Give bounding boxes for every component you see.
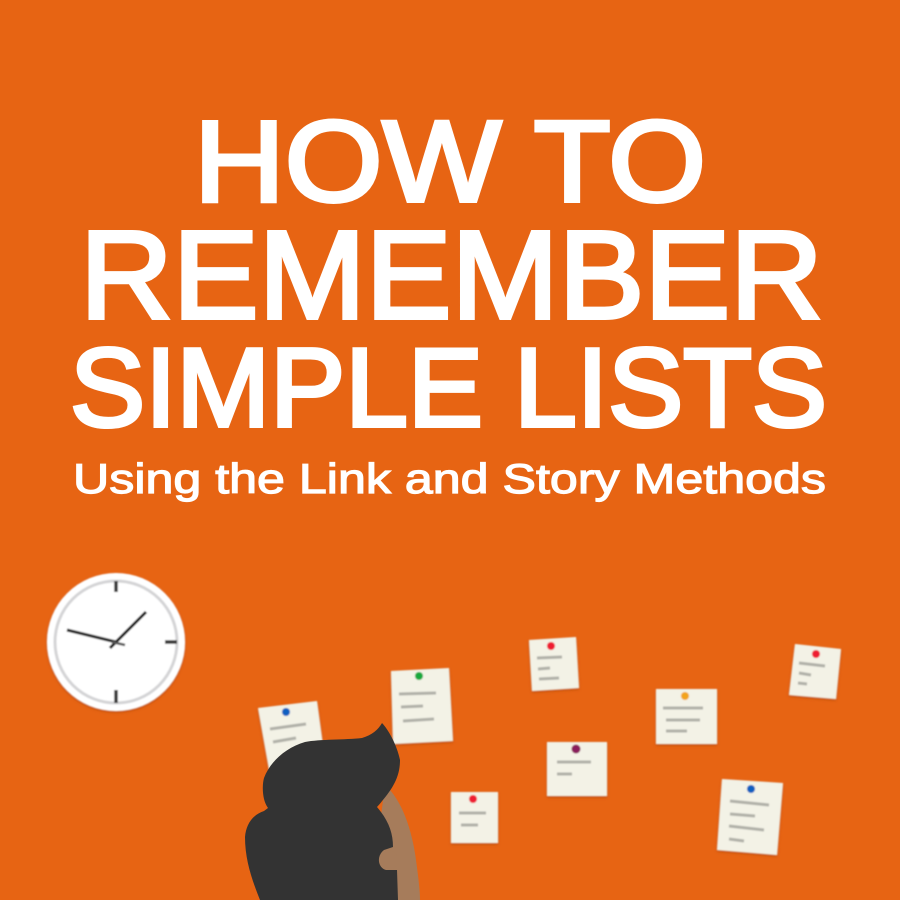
note: red pin top — [529, 637, 579, 691]
subtitle: Using the Link and Story Methods — [73, 455, 826, 502]
title: SIMPLE LISTS — [70, 326, 827, 450]
note: red pin right — [789, 644, 841, 699]
title: HOW TO — [194, 98, 706, 226]
icon: wall clock — [47, 573, 185, 711]
note: orange pin — [656, 689, 717, 744]
ear — [378, 850, 398, 870]
person from behind — [245, 723, 420, 900]
title — [70, 98, 827, 450]
note: blue pin left — [258, 701, 325, 775]
title: REMEMBER — [80, 206, 823, 345]
note: red pin bottom — [451, 792, 498, 843]
note: blue pin right — [717, 779, 783, 855]
note: green pin — [391, 668, 453, 744]
hair — [245, 723, 400, 900]
note: purple pin — [547, 742, 607, 796]
face and neck — [370, 785, 420, 900]
